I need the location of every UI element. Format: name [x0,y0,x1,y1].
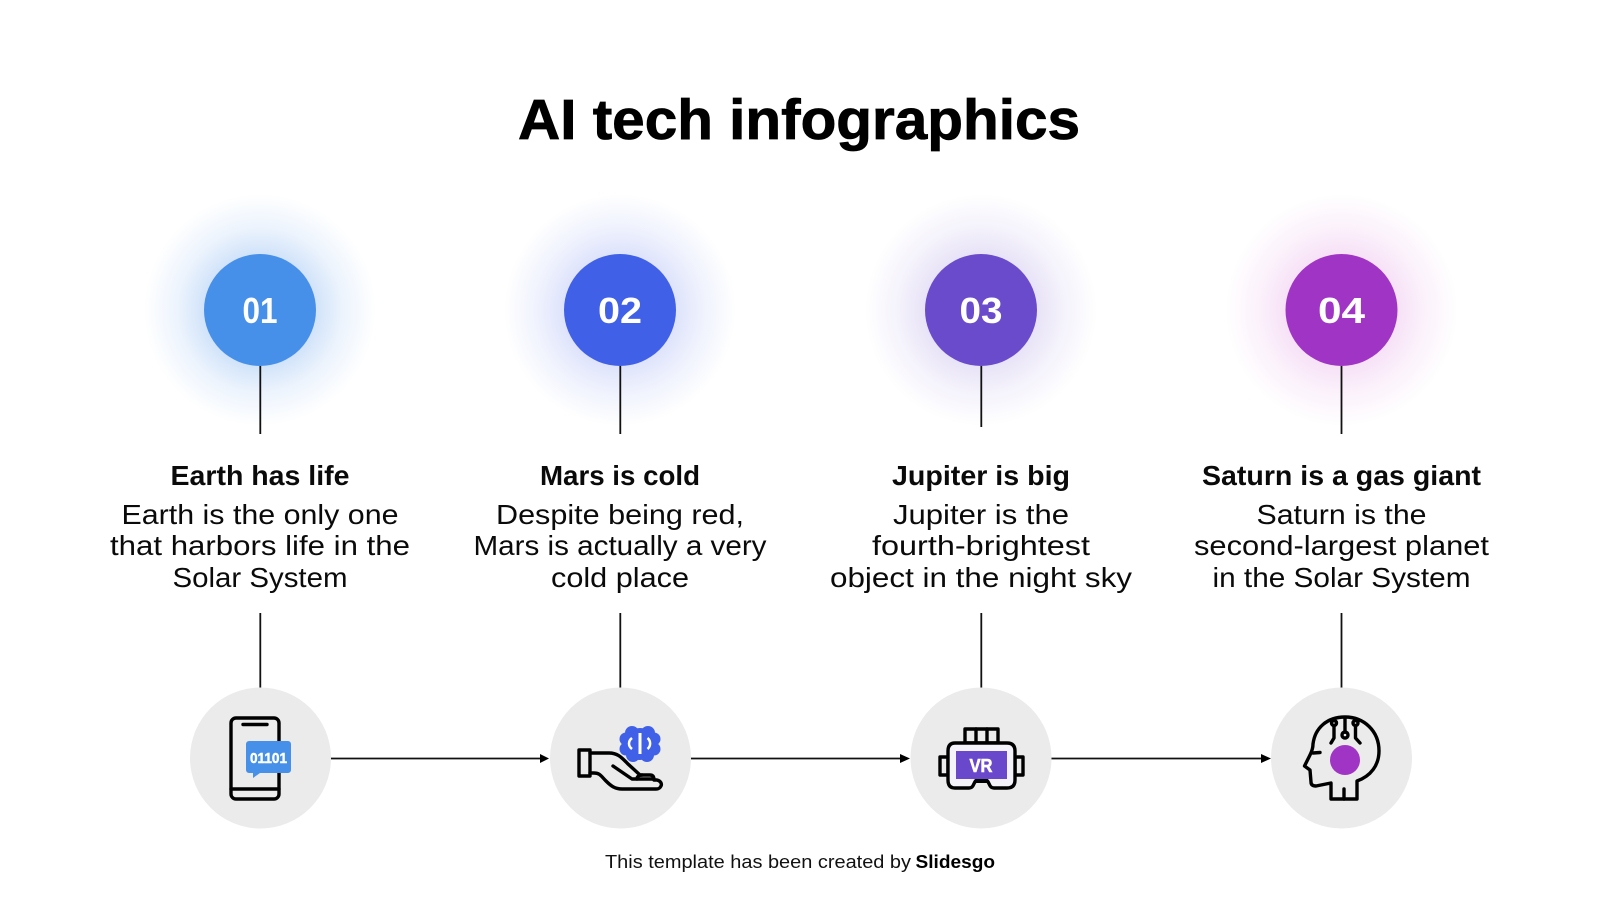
icon: AI head with circuits [1304,717,1379,799]
body text 02 [474,499,766,593]
number badge 04 [1286,254,1398,366]
body text 03 [830,499,1132,593]
panel: step 01 [110,194,410,828]
connector lower 01 [259,613,261,688]
connector upper 01 [259,366,261,434]
body text 04: Saturn is the [1256,499,1426,530]
body text 01: that harbors life in the [110,530,410,561]
body text 02: Mars is actually a very [474,530,766,561]
footer credit: Slidesgo [916,852,995,872]
heading 02: Mars is cold [540,460,700,491]
arrow: step 3 to 4 [1051,754,1271,763]
glow 02 [504,194,736,426]
body text 01: Earth is the only one [122,499,398,530]
number badge 03: 03 [960,290,1002,331]
panel: step 04 [1194,194,1489,828]
heading 04: Saturn is a gas giant [1202,460,1481,491]
glow 03 [865,194,1097,426]
icon circle 04 [1271,688,1412,828]
body text 04: in the Solar System [1212,562,1470,593]
icon: VR headset: VR [970,756,992,776]
body text 02: Despite being red, [496,499,744,530]
number badge 03 [925,254,1037,366]
heading 01: Earth has life [170,460,350,491]
panel: step 02 [474,194,766,828]
icon circle 02 [550,688,691,828]
connector upper 04 [1340,366,1342,434]
connector lower 03 [980,613,982,688]
body text 02: cold place [551,562,689,593]
arrow: step 2 to 3 [691,754,910,763]
number badge 01 [204,254,316,366]
body text 03: object in the night sky [830,562,1132,593]
icon: hand holding brain [579,726,661,789]
footer credit: This template has been created by [605,852,911,872]
body text 01 [110,499,410,593]
body text 01: Solar System [172,562,348,593]
number badge 02: 02 [598,290,642,331]
icon circle 01 [190,688,331,828]
panel: step 03 [830,194,1132,828]
arrows between icons [331,754,1271,763]
number badge 01: 01 [242,290,278,331]
icon: phone with binary message: 01101 [250,750,287,767]
body text 03: fourth-brightest [872,530,1090,561]
connector lower 02 [619,613,621,688]
connector upper 02 [619,366,621,434]
glow 04 [1226,194,1458,426]
icon: phone with binary message [231,718,291,799]
body text 03: Jupiter is the [893,499,1069,530]
body text 04: second-largest planet [1194,530,1489,561]
arrow: step 1 to 2 [331,754,549,763]
icon circle 03 [910,688,1052,828]
heading 03: Jupiter is big [892,460,1070,491]
body text 04 [1194,499,1489,593]
connector upper 03 [980,366,982,427]
number badge 02 [564,254,676,366]
icon: VR headset [940,729,1023,788]
connector lower 04 [1340,613,1342,688]
title: AI tech infographics [518,88,1080,152]
glow 01 [144,194,376,426]
number badge 04: 04 [1318,290,1365,331]
